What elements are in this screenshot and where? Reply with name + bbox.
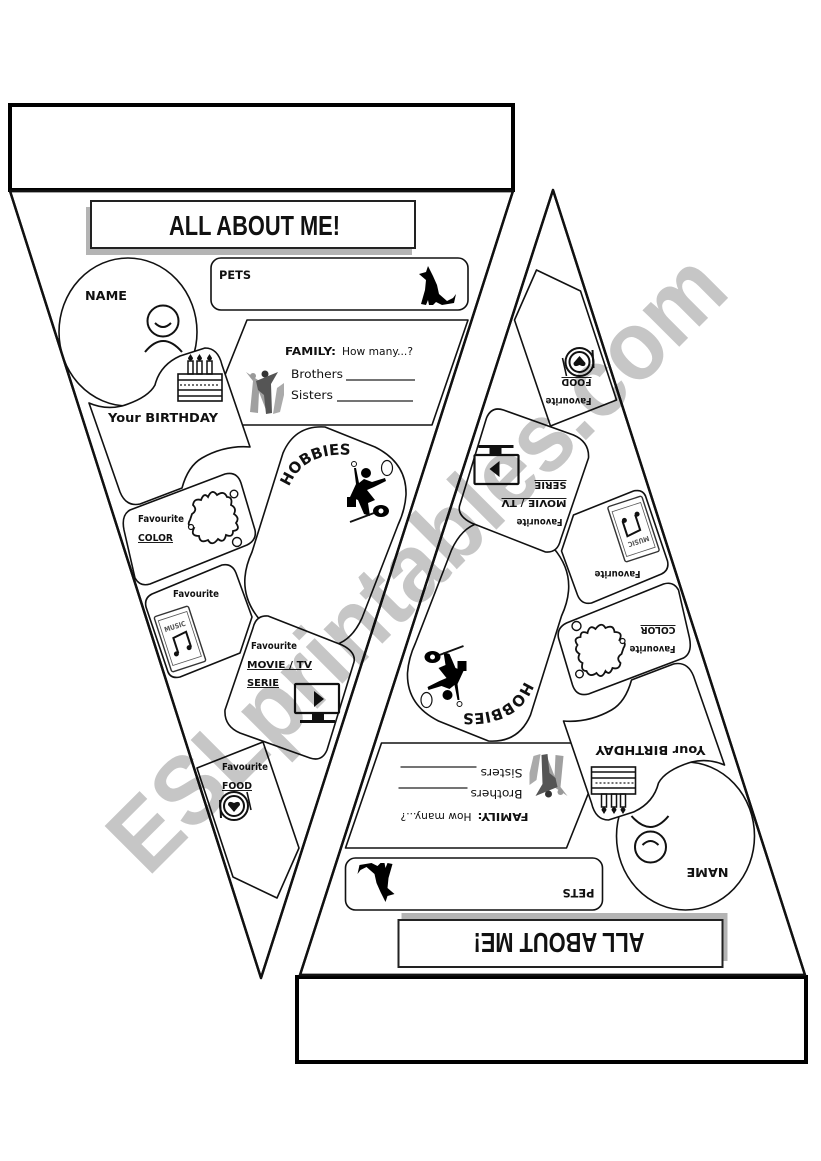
icon: plate with fork and knife (220, 792, 251, 820)
icon: music phone inverted: MUSIC (627, 534, 650, 548)
panel: favourite color inverted (558, 583, 690, 695)
icon: hobbies figure (347, 460, 392, 522)
icon: person inverted (632, 816, 668, 862)
panel: family inverted: FAMILY: (478, 810, 528, 823)
panel: hobbies: HOBBIES (280, 444, 350, 486)
panel: family: Brothers (291, 367, 343, 381)
panel: favourite food: FOOD (222, 781, 252, 792)
title banner inverted (398, 913, 728, 967)
panel: birthday inverted (564, 664, 724, 820)
panel: name circle inverted: NAME (686, 865, 728, 879)
panel: favourite movie or TV series inverted: SERIE (534, 479, 566, 490)
panel: favourite music (146, 565, 252, 677)
panel: favourite movie or TV series: SERIE (247, 678, 279, 689)
blank name box left (10, 105, 513, 190)
icon: person (145, 306, 182, 352)
blank name box right (297, 977, 806, 1062)
icon: family group (246, 370, 284, 414)
icon: family group inverted (530, 754, 568, 798)
panel: family inverted: Sisters (480, 766, 522, 780)
icon: paint splat inverted (572, 622, 625, 678)
panel: family inverted: Brothers (470, 787, 522, 801)
panel: favourite food inverted: Favourite (546, 395, 592, 406)
title banner inverted: ALL ABOUT ME! (474, 927, 644, 958)
panel: favourite music: Favourite (173, 589, 219, 600)
panel: family inverted (346, 743, 608, 848)
panel: family: Sisters (291, 388, 333, 402)
panel: pets inverted (346, 858, 602, 910)
panel: favourite music inverted: Favourite (594, 568, 640, 579)
panel: favourite food: Favourite (222, 762, 268, 773)
panel: favourite food inverted (514, 270, 616, 426)
icon: TV with play button (295, 684, 339, 723)
icon: dog inverted (358, 863, 394, 902)
panel: pets (211, 258, 468, 310)
panel: favourite food inverted: FOOD (561, 376, 592, 387)
panel: pets: PETS (219, 268, 251, 282)
panel: birthday inverted: Your BIRTHDAY (595, 743, 707, 758)
panel: favourite color inverted: COLOR (640, 624, 676, 635)
panel: favourite music inverted (562, 491, 668, 603)
panel: hobbies inverted: HOBBIES (464, 682, 534, 724)
panel: favourite movie or TV series (225, 616, 354, 759)
left pennant (8, 103, 515, 980)
panel: family: FAMILY: (285, 345, 336, 358)
panel: name circle (59, 258, 197, 406)
right pennant inverted content (306, 262, 779, 968)
panel: pets inverted: PETS (562, 886, 594, 900)
panel: family (205, 320, 468, 425)
panel: favourite food (197, 742, 299, 898)
panel: favourite movie or TV series: MOVIE / TV (247, 660, 313, 671)
icon: dog (419, 266, 456, 305)
icon: birthday cake (178, 354, 222, 401)
icon: plate with fork and knife inverted (562, 348, 594, 376)
panel: birthday: Your BIRTHDAY (107, 410, 219, 425)
panel: favourite movie or TV series inverted (459, 409, 589, 552)
panel: favourite color: COLOR (138, 533, 174, 544)
title banner: ALL ABOUT ME! (169, 210, 340, 241)
panel: favourite movie or TV series inverted: MOVIE / TV (501, 497, 566, 508)
panel: name circle inverted (616, 762, 754, 910)
pennant triangle outline left (10, 191, 513, 978)
panel: favourite color (123, 473, 255, 585)
icon: paint splat (188, 490, 242, 546)
panel: favourite movie or TV series inverted: Favourite (516, 516, 562, 527)
icon: birthday cake inverted (592, 767, 636, 814)
panel: hobbies (244, 426, 407, 644)
right pennant outline and blank name box (297, 190, 806, 1062)
icon: hobbies figure inverted (421, 646, 466, 708)
icon: music phone: MUSIC (163, 620, 187, 634)
panel: name circle: NAME (85, 289, 127, 303)
panel: family: How many...? (342, 345, 413, 358)
panel: favourite color inverted: Favourite (630, 643, 676, 654)
panel: family inverted: How many...? (400, 810, 472, 823)
panel: birthday (89, 348, 250, 504)
panel: favourite color: Favourite (138, 514, 184, 525)
panel: favourite movie or TV series: Favourite (251, 641, 297, 652)
pennant triangle outline right (300, 190, 805, 975)
icon: TV with play button inverted (474, 445, 518, 484)
title banner (86, 201, 415, 255)
panel: hobbies inverted (406, 524, 570, 742)
watermark: ESLprintables.com (85, 231, 747, 893)
